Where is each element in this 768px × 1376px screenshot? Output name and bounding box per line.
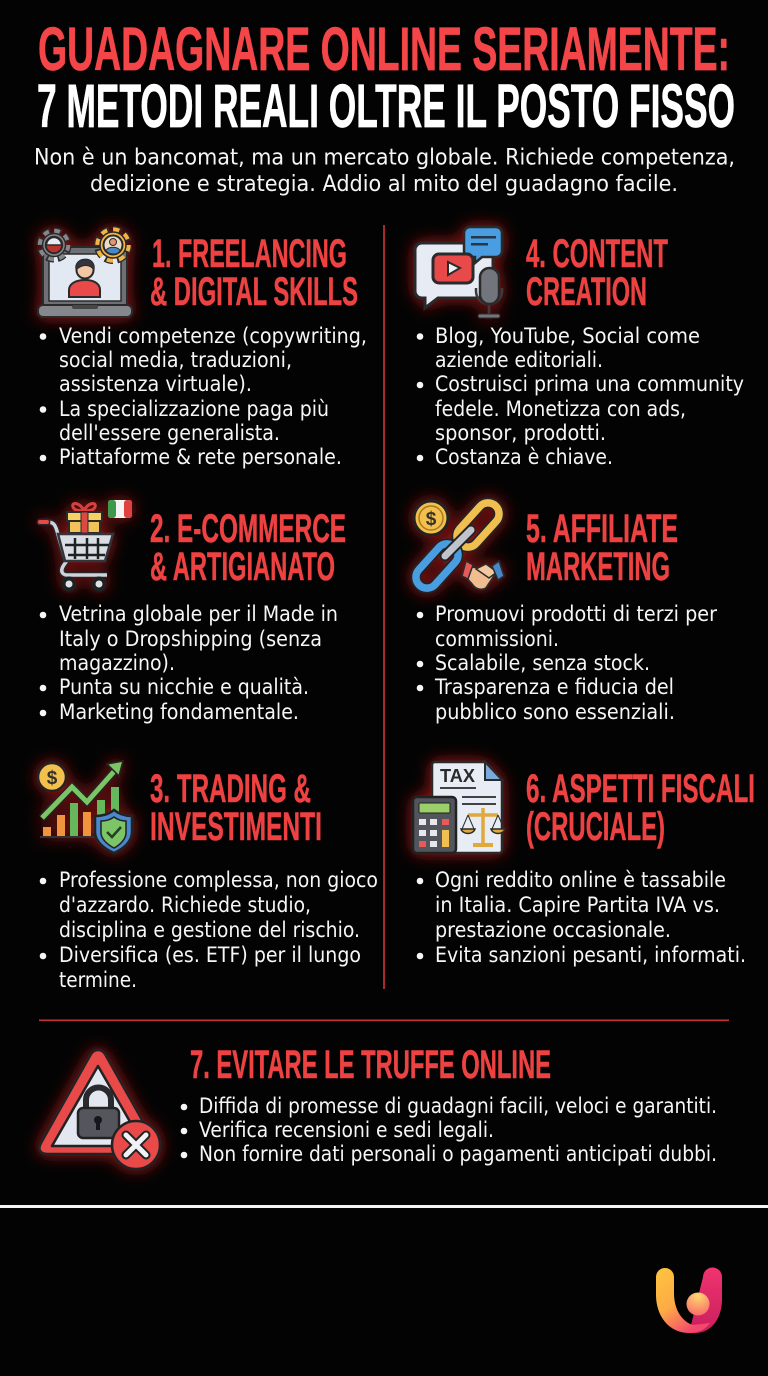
icon: tax document, calculator and scales [413, 762, 505, 853]
bullets: prestazione occasionale. [435, 918, 671, 943]
subtitle: dedizione e strategia. Addio al mito del guadagno facile. [90, 171, 678, 197]
bullets: social media, traduzioni, [59, 348, 292, 373]
icon: shopping cart, gift and flag [40, 500, 132, 590]
heading [150, 232, 358, 314]
heading: & ARTIGIANATO [150, 545, 335, 589]
panel: fiscal aspects [413, 762, 755, 968]
bullets [417, 324, 744, 470]
bullets: sponsor, prodotti. [435, 421, 606, 446]
bullets: disciplina e gestione del rischio. [59, 918, 360, 943]
icon: laptop with gears [38, 230, 132, 317]
bullets: Costanza è chiave. [435, 445, 613, 470]
horizontal divider [39, 1020, 729, 1021]
icon: warning triangle with padlock [39, 1050, 160, 1169]
bullets: Verifica recensioni e sedi legali. [199, 1118, 494, 1143]
heading: & DIGITAL SKILLS [150, 270, 358, 314]
icon: chart, coin and shield [38, 761, 132, 853]
vertical divider [383, 225, 385, 989]
icon: chart, coin and shield: $ [47, 768, 58, 789]
bullets: termine. [59, 968, 137, 993]
bullets: Marketing fondamentale. [59, 700, 299, 725]
panel: content creation [415, 227, 744, 470]
icon: video, chat and microphone [415, 227, 502, 318]
bullets: dell'essere generalista. [59, 421, 280, 446]
heading: 4. CONTENT [526, 232, 668, 276]
panel: freelancing [38, 230, 367, 470]
bullets: d'azzardo. Richiede studio, [59, 893, 311, 918]
bullets [417, 602, 717, 725]
bullets: Vendi competenze (copywriting, [59, 324, 367, 349]
heading: 1. FREELANCING [152, 232, 347, 276]
bullets: magazzino). [59, 651, 175, 676]
heading [526, 507, 678, 589]
heading [150, 767, 322, 849]
heading [526, 232, 668, 314]
heading [526, 767, 755, 849]
panel: trading [38, 761, 378, 993]
bullets [181, 1094, 717, 1167]
bullets: commissioni. [435, 627, 559, 652]
bullets: Trasparenza e fiducia del [434, 675, 674, 700]
bullets [417, 868, 746, 968]
heading: 3. TRADING & [150, 767, 311, 811]
bullets: Promuovi prodotti di terzi per [435, 602, 717, 627]
bullets [40, 324, 367, 470]
bullets: Ogni reddito online è tassabile [435, 868, 726, 893]
bullets: Professione complessa, non gioco [59, 868, 378, 893]
bullets: fedele. Monetizza con ads, [435, 397, 686, 422]
footer rule [0, 1205, 768, 1208]
bullets: Scalabile, senza stock. [435, 651, 650, 676]
heading: CREATION [526, 270, 647, 314]
title [37, 15, 735, 140]
bullets: La specializzazione paga più [59, 397, 329, 422]
panel: affiliate marketing [411, 498, 717, 725]
heading: 2. E-COMMERCE [150, 507, 346, 551]
heading: MARKETING [526, 545, 670, 589]
icon: chain links, coin and handshake [411, 498, 504, 593]
bullets: Blog, YouTube, Social come [435, 324, 700, 349]
bullets: pubblico sono essenziali. [435, 700, 675, 725]
bullets: Punta su nicchie e qualità. [59, 675, 309, 700]
heading: (CRUCIALE) [526, 805, 665, 849]
logo [656, 1268, 722, 1333]
bullets: Piattaforme & rete personale. [59, 445, 342, 470]
subtitle [34, 144, 735, 197]
bullets: in Italia. Capire Partita IVA vs. [435, 893, 720, 918]
heading: 5. AFFILIATE [526, 507, 678, 551]
bullets: Italy o Dropshipping (senza [59, 627, 322, 652]
bullets: assistenza virtuale). [59, 372, 252, 397]
bullets [40, 868, 378, 993]
panel: avoiding scams [39, 1043, 717, 1169]
icon: tax document, calculator and scales: TAX [440, 766, 475, 786]
icon: chain links, coin and handshake: $ [426, 509, 437, 530]
panel: e-commerce [40, 500, 346, 725]
bullets: aziende editoriali. [435, 348, 603, 373]
heading: INVESTIMENTI [150, 805, 322, 849]
bullets [40, 602, 338, 725]
heading [150, 507, 346, 589]
bullets: Vetrina globale per il Made in [59, 602, 338, 627]
bullets: Diversifica (es. ETF) per il lungo [59, 943, 361, 968]
